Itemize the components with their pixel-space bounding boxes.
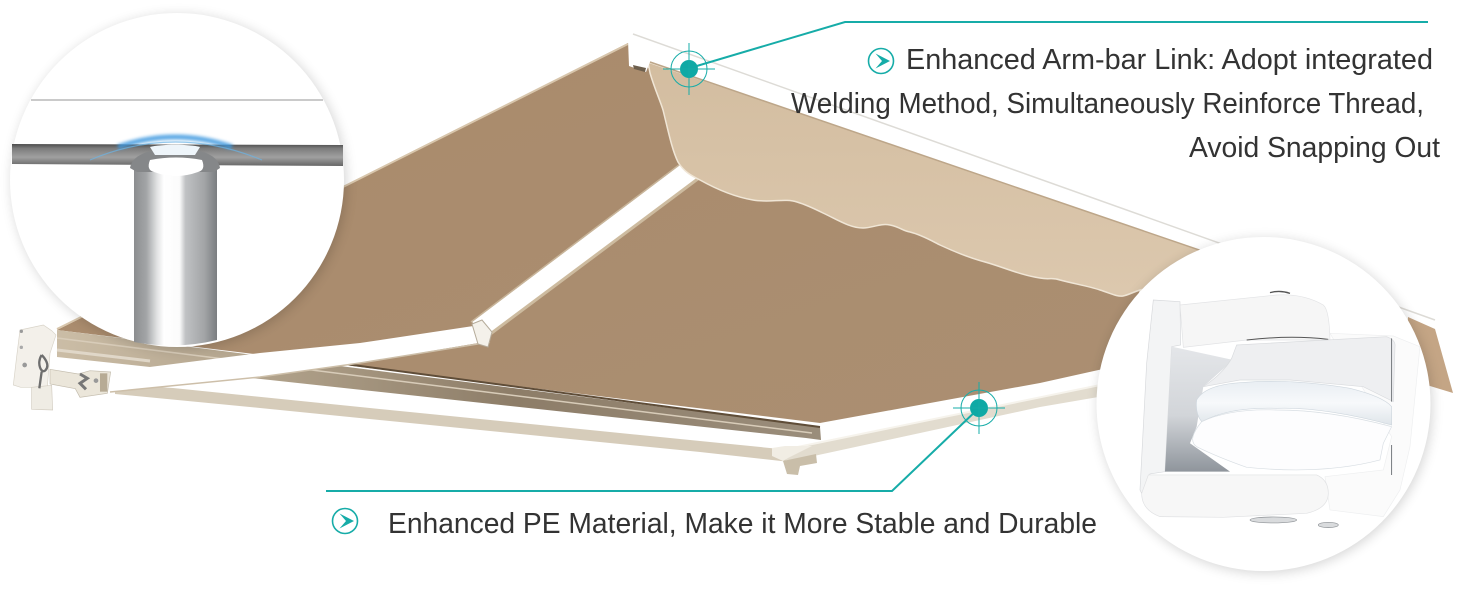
central body bbox=[1203, 337, 1395, 402]
mounting plate bbox=[1140, 300, 1181, 493]
canopy fabric bbox=[57, 43, 1140, 423]
steel tube bbox=[134, 168, 217, 346]
valance bbox=[648, 62, 1240, 296]
callout text: arm-bar link: Avoid Snapping Out bbox=[1189, 132, 1440, 164]
front bar bbox=[628, 34, 1435, 330]
callout line: PE material bbox=[326, 408, 979, 491]
lower donut bbox=[1193, 410, 1392, 470]
callout text: PE material: Enhanced PE Material, Make it More Stable and Durable bbox=[388, 508, 1097, 540]
gray recess bbox=[1165, 347, 1233, 472]
weld band bbox=[12, 144, 343, 166]
main left arm bbox=[110, 325, 490, 392]
canopy side edge bbox=[57, 44, 628, 329]
right detail circle bbox=[1096, 237, 1432, 573]
right arm bbox=[783, 383, 1110, 462]
elbow joint bbox=[472, 320, 492, 347]
roller bar bbox=[57, 330, 821, 440]
callout text: arm-bar link: Enhanced Arm-bar Link: Adopt integrated bbox=[906, 44, 1433, 76]
right canopy remnant bbox=[1405, 317, 1453, 393]
top edge line bbox=[31, 99, 323, 101]
target marker: PE material bbox=[953, 382, 1005, 434]
bolts bbox=[1250, 517, 1338, 528]
weld joint bbox=[130, 145, 220, 176]
target marker: arm-bar link bbox=[663, 43, 715, 95]
right arm bracket bbox=[772, 446, 817, 475]
top block bbox=[1180, 295, 1330, 347]
lower arm bbox=[115, 384, 790, 462]
right plate bbox=[1325, 333, 1420, 517]
left detail circle bbox=[10, 13, 346, 349]
blue weld glow bbox=[90, 137, 262, 160]
left hardware bbox=[13, 325, 111, 410]
icon: arrow in circle bbox=[332, 508, 358, 534]
diagonal arm bbox=[471, 165, 699, 335]
callout text: arm-bar link bbox=[791, 44, 1440, 164]
seam line bbox=[1390, 338, 1393, 477]
icon: arrow in circle bbox=[868, 48, 894, 74]
upper donut bbox=[1196, 381, 1392, 425]
bottom block bbox=[1142, 475, 1328, 517]
callout line: arm-bar link bbox=[690, 22, 1428, 68]
awning illustration bbox=[13, 34, 1453, 475]
callout text: arm-bar link: Welding Method, Simultaneously Reinforce Thread, bbox=[791, 88, 1424, 120]
